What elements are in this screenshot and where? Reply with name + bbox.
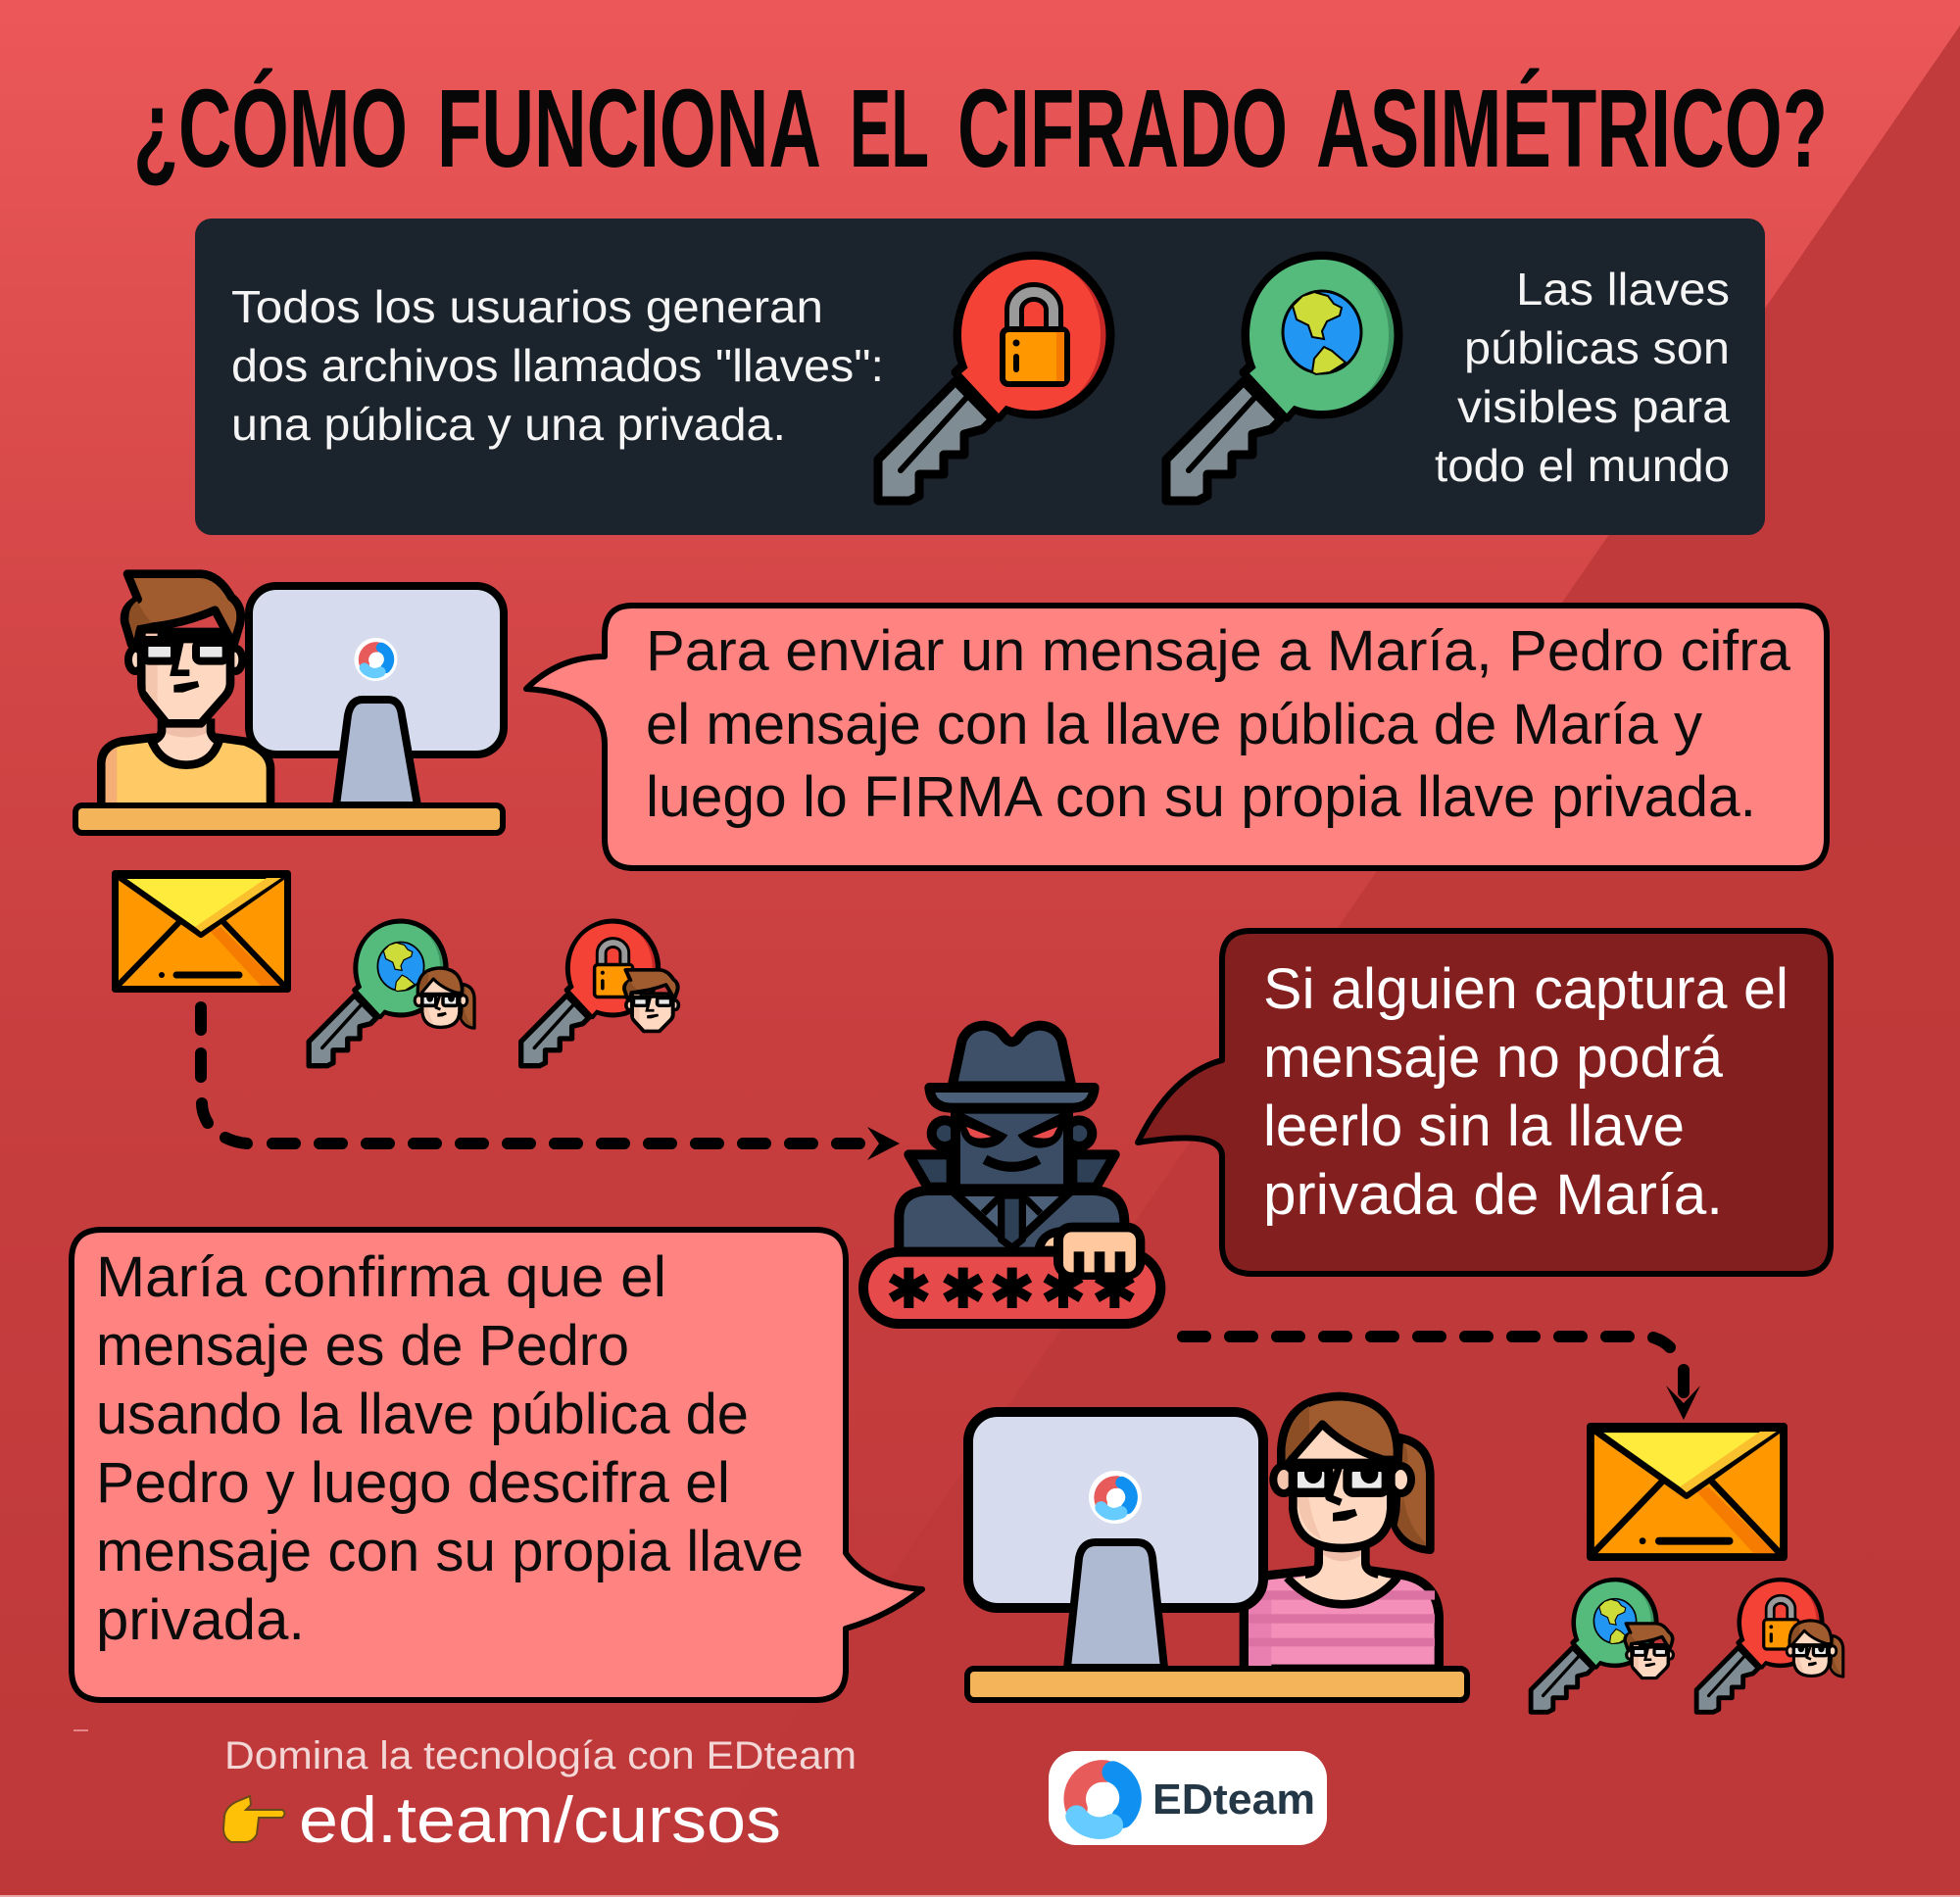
title: EL	[850, 67, 929, 190]
icon: private key with lock	[878, 256, 1110, 501]
speech bubble: hacker warning: Si alguien captura el	[1263, 957, 1788, 1021]
text block: users generate keys: dos archivos llamados "llaves":	[231, 340, 884, 391]
illustration: hacker	[863, 1026, 1160, 1324]
speech bubble: María confirms: privada.	[96, 1588, 305, 1652]
text block: users generate keys: Todos los usuarios generan	[231, 281, 823, 332]
speech bubble: Pedro: el mensaje con la llave pública de María y	[646, 693, 1702, 756]
icon: pointing hand	[223, 1796, 284, 1842]
speech bubble: María confirms: mensaje es de Pedro	[96, 1314, 629, 1378]
text block: public keys visible: Las llaves	[1516, 264, 1730, 315]
speech bubble: María confirms: María confirma que el	[96, 1245, 666, 1309]
icon: María public key	[309, 921, 474, 1066]
speech bubble: hacker warning: mensaje no podrá	[1263, 1026, 1724, 1090]
speech bubble: María confirms	[72, 1230, 922, 1700]
footer text: tagline: Domina la tecnología con EDteam	[224, 1734, 857, 1777]
text block: public keys visible: públicas son	[1464, 322, 1730, 373]
icon: María private key	[1696, 1580, 1843, 1712]
icon: envelope received	[1591, 1427, 1784, 1557]
speech bubble: Pedro: Para enviar un mensaje a María, Pedro cifra	[646, 619, 1791, 683]
icon: envelope sent	[116, 874, 288, 990]
text block: public keys visible: todo el mundo	[1435, 440, 1730, 491]
text block: public keys visible	[1435, 264, 1730, 491]
icon: Pedro private key	[521, 921, 678, 1066]
speech bubble: María confirms: usando la llave pública de	[96, 1383, 749, 1446]
title	[133, 67, 1828, 190]
arrow: hacker to envelope	[1183, 1337, 1700, 1420]
speech bubble: hacker warning: privada de María.	[1263, 1163, 1723, 1227]
speech bubble: María confirms: Pedro y luego descifra el	[96, 1451, 730, 1515]
text block: users generate keys: una pública y una privada.	[231, 399, 786, 450]
footer text: url: ed.team/cursos	[299, 1783, 781, 1856]
speech bubble: Pedro: luego lo FIRMA con su propia llave privada.	[646, 765, 1756, 829]
illustration: Pedro at computer	[75, 574, 504, 833]
arrow: envelope to hacker	[201, 1007, 900, 1160]
logo: EDteam: EDteam	[1152, 1775, 1315, 1824]
title: FUNCIONA	[437, 67, 821, 190]
speech bubble: Pedro	[526, 606, 1827, 868]
text block: public keys visible: visibles para	[1457, 381, 1730, 432]
logo: EDteam	[1049, 1751, 1327, 1845]
icon: public key with globe	[1166, 256, 1398, 501]
speech bubble: María confirms: mensaje con su propia llave	[96, 1520, 804, 1583]
text block: users generate keys	[231, 281, 884, 450]
panel: intro on keys	[195, 219, 1765, 535]
illustration: María at computer	[967, 1396, 1467, 1700]
speech bubble: hacker warning	[1138, 931, 1831, 1274]
title: CIFRADO	[957, 67, 1288, 190]
speech bubble: hacker warning: leerlo sin la llave	[1263, 1094, 1685, 1158]
icon: Pedro public key	[1531, 1580, 1673, 1712]
title: ¿CÓMO	[133, 67, 408, 190]
